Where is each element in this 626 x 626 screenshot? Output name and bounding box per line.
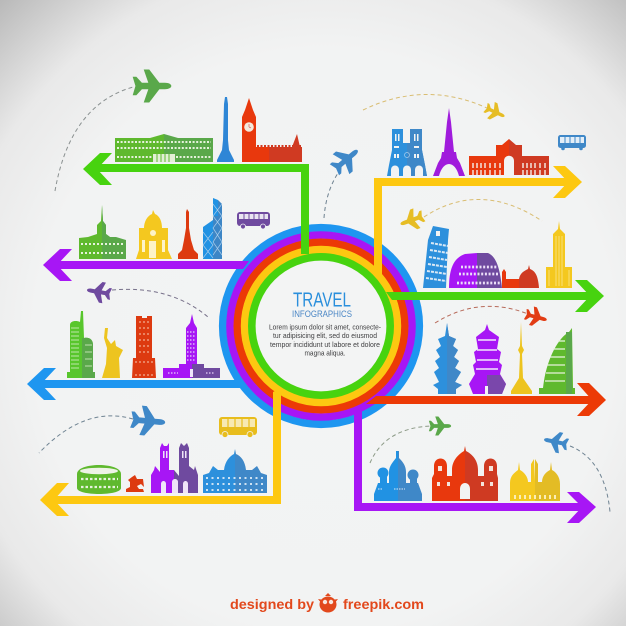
landmark: red spire	[178, 209, 198, 259]
icon: green plane lower	[429, 416, 451, 436]
heading: TRAVEL: TRAVEL	[293, 290, 351, 312]
text block: lorem ipsum: Lorem ipsum dolor sit amet, consecte-	[269, 322, 382, 332]
landmark: red domed cathedral	[432, 446, 498, 501]
landmark: Colosseum	[449, 253, 502, 288]
landmark: blue pagoda	[433, 323, 462, 394]
landmark: Leaning Tower of Pisa	[423, 226, 449, 288]
dashed flight paths	[39, 87, 610, 512]
landmark: red palace	[469, 139, 549, 175]
icon: purple bus	[237, 212, 270, 229]
icon: freepik mascot	[318, 593, 338, 612]
icon: yellow bus	[219, 417, 257, 438]
landmark: Notre Dame	[387, 129, 427, 176]
landmark: red tower	[132, 316, 156, 378]
footer credit	[230, 593, 424, 612]
icon: red plane	[523, 305, 549, 329]
arrow: green right	[386, 280, 604, 312]
landmark: yellow tower	[546, 221, 572, 288]
text block: lorem ipsum	[269, 322, 382, 358]
text block: lorem ipsum: tempor incididunt ut labore et dolore	[270, 340, 380, 349]
landmark: green palace	[115, 134, 213, 162]
icon: purple plane	[85, 280, 113, 304]
arrow: yellow top right	[374, 166, 582, 277]
landmark: blue onion-domed cathedral	[374, 451, 422, 501]
arrow: blue left	[27, 368, 243, 400]
landmark: blue column	[217, 97, 234, 162]
arrow: yellow bottom left	[40, 388, 281, 516]
footer credit: designed by	[230, 597, 315, 612]
landmark: Eiffel Tower	[433, 108, 465, 176]
landmark: yellow mosque	[510, 459, 560, 501]
icon: blue plane lower left	[130, 405, 166, 437]
text block: lorem ipsum: tur adipisicing elit, sed do eiusmod	[273, 331, 377, 340]
landmark: green town hall	[79, 205, 126, 259]
icon: yellow plane top right	[482, 99, 508, 125]
icon: blue plane lower right	[542, 429, 570, 455]
landmark: green amphitheatre	[77, 465, 121, 494]
arrow: red right	[366, 383, 606, 416]
icon: blue bus	[558, 135, 586, 150]
arrow: green top left	[83, 153, 309, 254]
landmark: green twin tower	[67, 311, 95, 378]
landmark: green Burj Al Arab	[539, 328, 575, 394]
landmark: yellow church	[136, 210, 172, 259]
landmark: red equestrian statue	[126, 475, 144, 492]
landmark: purple pagoda	[469, 324, 506, 394]
heading: INFOGRAPHICS: INFOGRAPHICS	[292, 309, 352, 320]
icon: yellow plane middle	[397, 206, 427, 234]
landmark: Big Ben and Parliament	[242, 98, 302, 162]
arrow: purple bottom right	[354, 409, 596, 523]
arrow: purple left	[43, 249, 249, 281]
landmark: yellow needle tower	[511, 322, 532, 394]
icon: green plane	[133, 69, 171, 103]
footer credit: freepik.com	[343, 597, 424, 612]
text block: lorem ipsum: magna aliqua.	[304, 348, 346, 358]
icon: blue plane top	[326, 140, 366, 180]
landmark: purple abbey	[151, 443, 198, 493]
landmark: blue basilica	[203, 449, 267, 493]
landmark: red domed church	[502, 265, 539, 288]
landmark: Statue of Liberty	[102, 328, 123, 378]
landmark: blue skyscraper	[203, 198, 222, 259]
landmark: purple skyscraper	[163, 314, 220, 378]
central rainbow rings	[223, 228, 419, 424]
